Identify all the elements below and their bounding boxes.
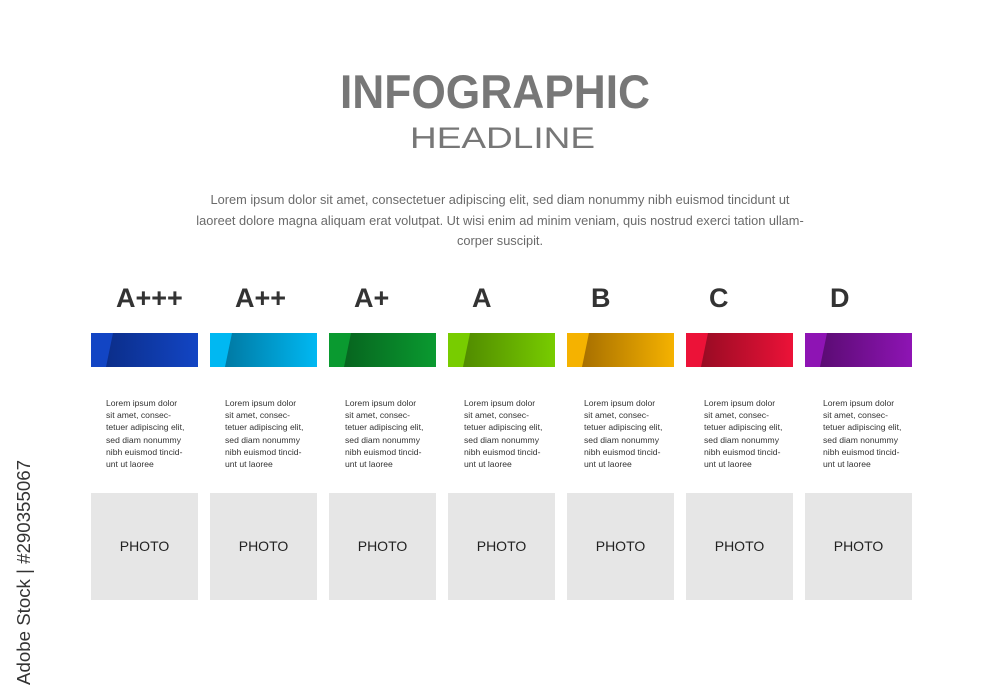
text C: Lorem ipsum dolor	[704, 398, 775, 408]
text C: sed diam nonummy	[704, 435, 779, 445]
text C: unt ut laoree	[704, 459, 752, 469]
watermark side text: Adobe Stock | #290355067	[14, 460, 34, 685]
intro paragraph: laoreet dolore magna aliquam erat volutpat. Ut wisi enim ad minim veniam, quis nostrud exerci tation ullam-	[196, 212, 804, 228]
label A++: A++	[235, 283, 286, 313]
photo A+++	[91, 493, 198, 600]
text D: unt ut laoree	[823, 459, 871, 469]
text A: Lorem ipsum dolor	[464, 398, 535, 408]
text C: sit amet, consec-	[704, 410, 769, 420]
text A+: unt ut laoree	[345, 459, 393, 469]
text D: nibh euismod tincid-	[823, 447, 899, 457]
text A+++: sed diam nonummy	[106, 435, 181, 445]
title: HEADLINE	[410, 122, 595, 155]
text A++: unt ut laoree	[225, 459, 273, 469]
label A: A	[472, 283, 492, 313]
label D: D	[830, 283, 850, 313]
photo C	[686, 493, 793, 600]
text A+++: Lorem ipsum dolor	[106, 398, 177, 408]
bar A++	[210, 333, 317, 367]
text A: sed diam nonummy	[464, 435, 539, 445]
text A+: Lorem ipsum dolor	[345, 398, 416, 408]
photo B: PHOTO	[596, 538, 645, 554]
photo A+++: PHOTO	[120, 538, 169, 554]
photo A: PHOTO	[477, 538, 526, 554]
text D: sit amet, consec-	[823, 410, 888, 420]
text B: tetuer adipiscing elit,	[584, 422, 662, 432]
text C: nibh euismod tincid-	[704, 447, 780, 457]
text A+++	[106, 398, 184, 469]
text A+++: tetuer adipiscing elit,	[106, 422, 184, 432]
label B: B	[591, 283, 610, 313]
text A++: tetuer adipiscing elit,	[225, 422, 303, 432]
intro paragraph: corper suscipit.	[457, 233, 543, 248]
title: INFOGRAPHIC	[340, 65, 650, 118]
photo A++	[210, 493, 317, 600]
text A+++: sit amet, consec-	[106, 410, 171, 420]
photo A	[448, 493, 555, 600]
text A	[464, 398, 542, 469]
intro paragraph	[196, 192, 804, 248]
title	[340, 65, 650, 155]
photo D	[805, 493, 912, 600]
photo C: PHOTO	[715, 538, 764, 554]
text D: Lorem ipsum dolor	[823, 398, 894, 408]
photo A+: PHOTO	[358, 538, 407, 554]
text D: tetuer adipiscing elit,	[823, 422, 901, 432]
text A++: Lorem ipsum dolor	[225, 398, 296, 408]
text A++	[225, 398, 303, 469]
text A+	[345, 398, 423, 469]
text A+: sed diam nonummy	[345, 435, 420, 445]
text B: Lorem ipsum dolor	[584, 398, 655, 408]
label A+++: A+++	[116, 283, 183, 313]
text A+++: nibh euismod tincid-	[106, 447, 182, 457]
text A++: nibh euismod tincid-	[225, 447, 301, 457]
text A+++: unt ut laoree	[106, 459, 154, 469]
text A+: tetuer adipiscing elit,	[345, 422, 423, 432]
text D: sed diam nonummy	[823, 435, 898, 445]
text C	[704, 398, 782, 469]
label A+: A+	[354, 283, 389, 313]
bar C	[686, 333, 793, 367]
photo D: PHOTO	[834, 538, 883, 554]
text B: nibh euismod tincid-	[584, 447, 660, 457]
text A++: sit amet, consec-	[225, 410, 290, 420]
text B: unt ut laoree	[584, 459, 632, 469]
text A+: nibh euismod tincid-	[345, 447, 421, 457]
text A: sit amet, consec-	[464, 410, 529, 420]
bar D	[805, 333, 912, 367]
text A+: sit amet, consec-	[345, 410, 410, 420]
bar A+++	[91, 333, 198, 367]
text A: unt ut laoree	[464, 459, 512, 469]
text D	[823, 398, 901, 469]
intro paragraph: Lorem ipsum dolor sit amet, consectetuer adipiscing elit, sed diam nonummy nibh euismod tincidunt ut	[210, 192, 790, 207]
text C: tetuer adipiscing elit,	[704, 422, 782, 432]
photo B	[567, 493, 674, 600]
text A++: sed diam nonummy	[225, 435, 300, 445]
text B: sed diam nonummy	[584, 435, 659, 445]
bar B	[567, 333, 674, 367]
text A: nibh euismod tincid-	[464, 447, 540, 457]
label C: C	[709, 283, 728, 313]
text A: tetuer adipiscing elit,	[464, 422, 542, 432]
photo A++: PHOTO	[239, 538, 288, 554]
text B: sit amet, consec-	[584, 410, 649, 420]
text B	[584, 398, 662, 469]
bar A	[448, 333, 555, 367]
photo A+	[329, 493, 436, 600]
bar A+	[329, 333, 436, 367]
